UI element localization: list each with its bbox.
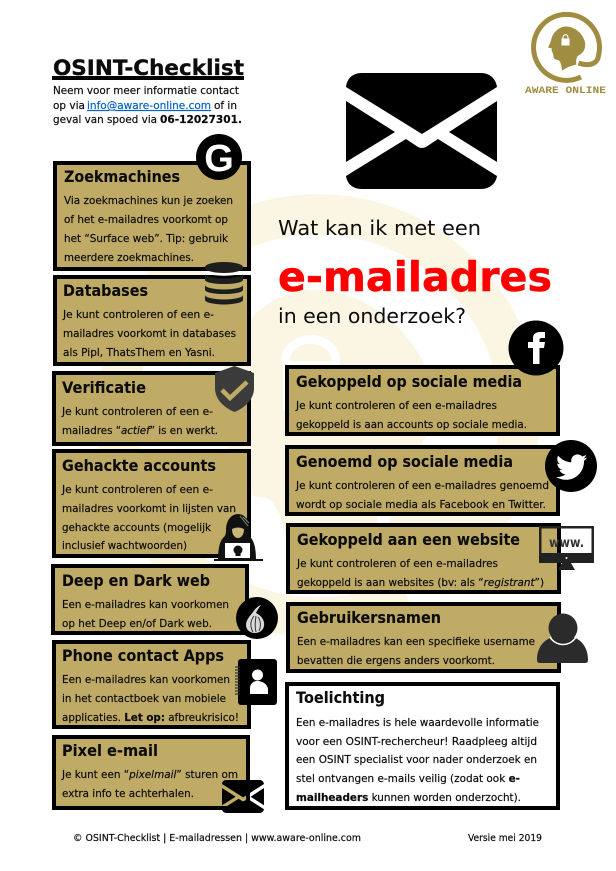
panel: Verificatie [54,373,249,444]
contact text: 06-12027301. [160,115,242,126]
panel: Phone contact Apps: Phone contact Apps [62,646,224,665]
panel: Deep en Dark web: Een e-mailadres kan voorkomen [62,600,229,611]
panel: Gekoppeld op sociale media: Je kunt controleren of een e-mailadres [295,401,497,412]
panel: Toelichting: mailheaders kunnen worden onderzocht). [296,793,521,804]
footer: © OSINT-Checklist | E-mailadressen | www.aware-online.com [73,833,361,844]
panel: Toelichting: Een e-mailadres is hele waardevolle informatie [296,718,539,729]
logo: Aware Online [525,14,606,97]
footer: Versie mei 2019 [468,833,542,844]
panel: Genoemd op sociale media: Genoemd op sociale media [296,452,513,471]
headline: Wat kan ik met een [278,216,481,240]
panel: Gekoppeld op sociale media: gekoppeld is aan accounts op sociale media. [296,420,527,431]
panel: Databases: Je kunt controleren of een e- [62,310,214,321]
icon: Tor onion [236,597,278,639]
panel: Gehackte accounts: mailadres voorkomt in lijsten van [62,504,236,515]
panel: Gebruikersnamen [288,604,559,671]
panel: Phone contact Apps: applicaties. Let op: afbreukrisico! [62,713,239,724]
panel: Toelichting: een OSINT specialist voor nader onderzoek en [296,755,537,766]
panel: Gekoppeld aan een website: gekoppeld is aan websites (bv: als “ registrant”) [297,578,544,589]
contact text: of in [214,101,237,112]
background watermark logo [117,214,520,617]
panel: Genoemd op sociale media: wordt op sociale media als Facebook en Twitter. [296,500,546,511]
contact text [53,86,242,126]
panel: Databases [55,277,249,364]
icon: Google G [196,134,242,180]
panel: Verificatie: Verificatie [62,378,146,397]
icon: Facebook [508,320,564,376]
panel: Gehackte accounts [54,451,249,556]
icon: www monitor [539,526,594,570]
panel: Gehackte accounts: Gehackte accounts [62,456,216,475]
panel: Zoekmachines: Via zoekmachines kun je zoeken [64,196,233,207]
panel: Databases: mailadres voorkomt in databases [63,329,236,340]
panel: Toelichting: Toelichting [296,688,385,707]
logo: Aware Online: AWARE ONLINE [525,85,606,97]
icon: user [537,614,588,663]
panel: Pixel e-mail: Je kunt een “pixelmail” sturen om [61,770,238,781]
icon: large envelope [346,73,497,189]
panel: Pixel e-mail: extra info te achterhalen. [62,789,194,800]
panel: Zoekmachines: meerdere zoekmachines. [64,253,194,264]
panel: Gehackte accounts: Je kunt controleren of een e- [61,485,213,496]
panel: Databases: als Pipl, ThatsThem en Yasni. [63,348,215,359]
icon: database [205,262,243,304]
contact text: info@aware-online.com [87,101,211,112]
panel: Deep en Dark web: op het Deep en/of Dark web. [62,619,212,630]
headline: in een onderzoek? [278,304,466,328]
panel: Gekoppeld op sociale media [287,367,558,434]
panel: Zoekmachines [55,163,249,269]
icon: hacker [214,514,263,564]
icon: Google G: G [204,138,234,180]
panel: Gekoppeld aan een website: Gekoppeld aan een website [297,530,520,549]
panel: Zoekmachines: het “Surface web”. Tip: gebruik [64,234,228,245]
panel: Zoekmachines: of het e-mailadres voorkomt op [64,215,228,226]
footer [73,833,542,844]
panel: Toelichting [287,684,558,808]
panel: Pixel e-mail [54,737,248,808]
panel: Gehackte accounts: inclusief wachtwoorden) [62,541,187,552]
panel: Toelichting: stel ontvangen e-mails veilig (zodat ook e- [296,774,520,785]
contact text: geval van spoed via [53,115,157,126]
icon: www monitor: www. [549,536,584,551]
panel: Gekoppeld op sociale media: Gekoppeld op sociale media [296,372,522,391]
panel: Deep en Dark web [53,566,247,633]
panel: Gebruikersnamen: Een e-mailadres kan een specifieke username [297,637,535,648]
panel: Phone contact Apps: Een e-mailadres kan voorkomen [62,675,230,686]
panel: Pixel e-mail: Pixel e-mail [62,741,158,760]
panel: Zoekmachines: Zoekmachines [64,167,180,186]
panel: Deep en Dark web: Deep en Dark web [62,571,210,590]
panel: Gekoppeld aan een website [288,525,559,592]
panel: Phone contact Apps: in het contactboek van mobiele [62,694,226,705]
panel: Genoemd op sociale media: Je kunt controleren of een e-mailadres genoemd [295,481,549,492]
panel: Gehackte accounts: gehackte accounts (mogelijk [62,523,211,534]
contact text: op via [53,101,85,112]
contact text: Neem voor meer informatie contact [53,86,239,97]
icon: small envelope [222,780,264,813]
panel: Verificatie: Je kunt controleren of een e- [61,407,213,418]
title: OSINT-Checklist [53,56,244,81]
panel: Genoemd op sociale media [287,447,558,514]
panel: Gebruikersnamen: bevatten die ergens anders voorkomt. [297,656,495,667]
icon: shield with check [215,366,254,412]
headline [278,216,552,328]
panel: Databases: Databases [63,281,148,300]
panel: Verificatie: mailadres “actief” is en werkt. [62,426,218,437]
headline: e-mailadres [278,253,552,301]
panel: Gekoppeld aan een website: Je kunt controleren of een e-mailadres [296,559,498,570]
icon: Twitter [545,440,597,492]
panel: Toelichting: voor een OSINT-rechercheur! Raadpleeg altijd [296,737,537,748]
panel: Gebruikersnamen: Gebruikersnamen [297,608,441,627]
icon: contact book [235,659,277,705]
panel: Phone contact Apps [54,642,249,727]
